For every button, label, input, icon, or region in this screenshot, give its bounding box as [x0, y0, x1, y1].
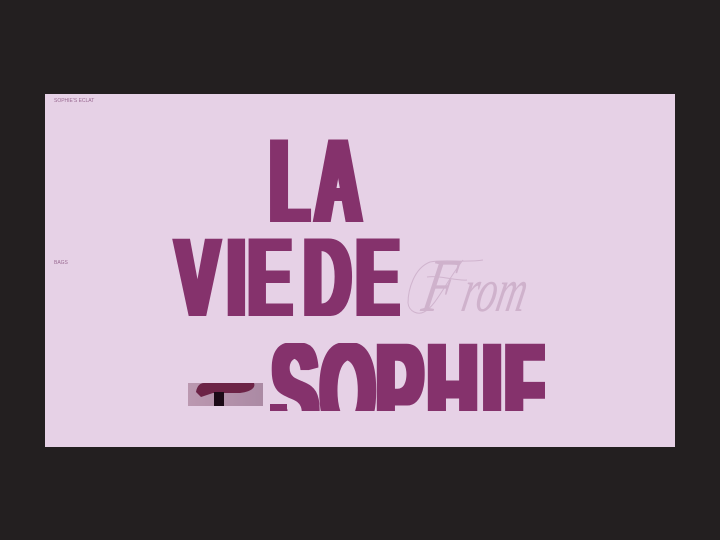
brand label: SOPHIE'S ECLAT [54, 98, 94, 104]
script word: From: rom [457, 257, 534, 325]
script word: From: F [415, 244, 465, 329]
title line: LA: LA [270, 114, 361, 248]
image thumbnail: cropped bag [188, 383, 263, 406]
script word: From [408, 244, 537, 329]
title line: VIE DE: VIE DE [176, 216, 399, 340]
title line: SOPHIE (cropped) [270, 343, 545, 411]
panel: slide [45, 94, 675, 447]
title line: SOPHIE (cropped): SOPHIE [271, 316, 551, 466]
category label: BAGS [54, 260, 69, 266]
